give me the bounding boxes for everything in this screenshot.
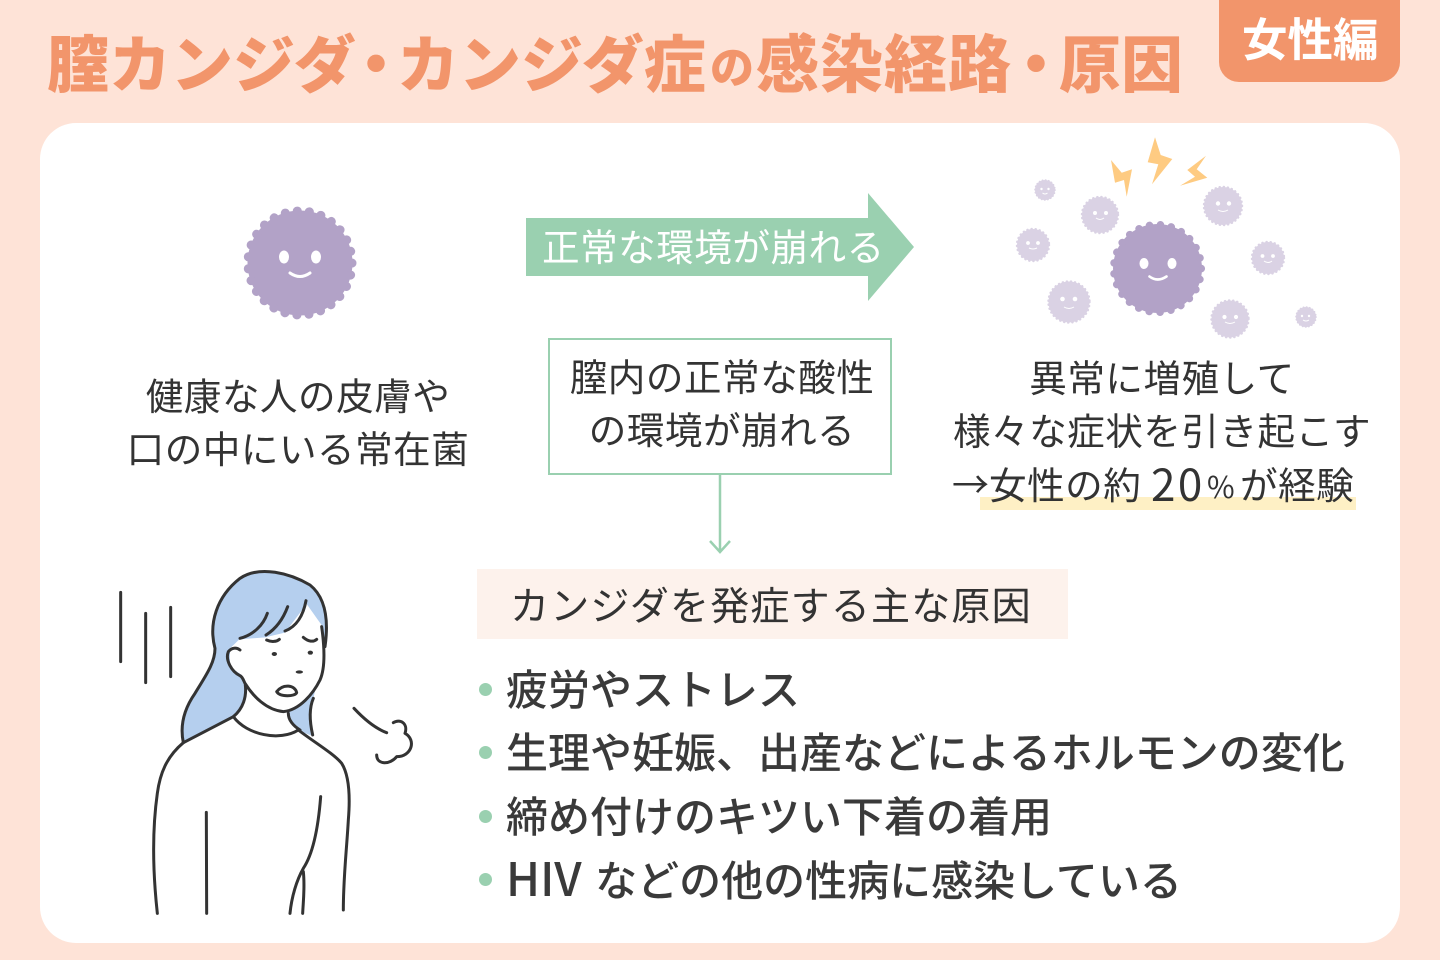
box: vaginal environment: の環境が崩れる [589, 400, 855, 455]
tag: women's edition: 女性編 [1242, 4, 1379, 70]
text: abnormal growth: 20 [1151, 450, 1205, 514]
text: resident bacteria [127, 366, 469, 474]
box: vaginal environment: 膣内の正常な酸性 [570, 347, 874, 402]
list: causes: 生理や妊娠、出産などによるホルモンの変化 [506, 720, 1345, 781]
text: abnormal growth: % [1207, 463, 1235, 507]
title: の [710, 32, 754, 96]
icon: candida germ [244, 206, 356, 320]
arrow: environment collapses [526, 193, 914, 301]
text: abnormal growth: → [952, 455, 989, 509]
main germ [1113, 224, 1202, 313]
box: vaginal environment [548, 338, 892, 475]
text: abnormal growth [952, 348, 1371, 514]
title: ・ [1005, 15, 1067, 105]
highlight [980, 497, 1356, 510]
text: abnormal growth: 女性の約 [989, 455, 1141, 510]
list: causes: HIV などの他の性病に感染している [506, 844, 1182, 910]
title: 膣カンジダ [47, 15, 356, 105]
list: causes [479, 657, 1345, 910]
text: resident bacteria: 健康な人の皮膚や [146, 366, 450, 421]
icon: tired woman [119, 570, 413, 915]
arrow: down to causes [709, 475, 731, 554]
text: abnormal growth: 様々な症状を引き起こす [953, 401, 1371, 456]
text: resident bacteria: 口の中にいる常在菌 [127, 419, 469, 474]
title: 原因 [1059, 15, 1183, 105]
arrow: environment collapses: 正常な環境が崩れる [542, 217, 885, 272]
title: カンジダ症 [397, 15, 706, 105]
title: ・ [345, 15, 407, 105]
text: abnormal growth: が経験 [1240, 455, 1354, 510]
icon: multiplying germs with lightning [1016, 138, 1317, 339]
panel: causes heading: カンジダを発症する主な原因 [510, 576, 1032, 632]
title [47, 15, 1183, 106]
text: abnormal growth: 異常に増殖して [1029, 348, 1295, 403]
tag: women's edition [1219, 0, 1400, 82]
list: causes: 締め付けのキツい下着の着用 [506, 784, 1052, 845]
list: causes: 疲労やストレス [506, 657, 800, 718]
title: 感染経路 [756, 15, 1012, 106]
